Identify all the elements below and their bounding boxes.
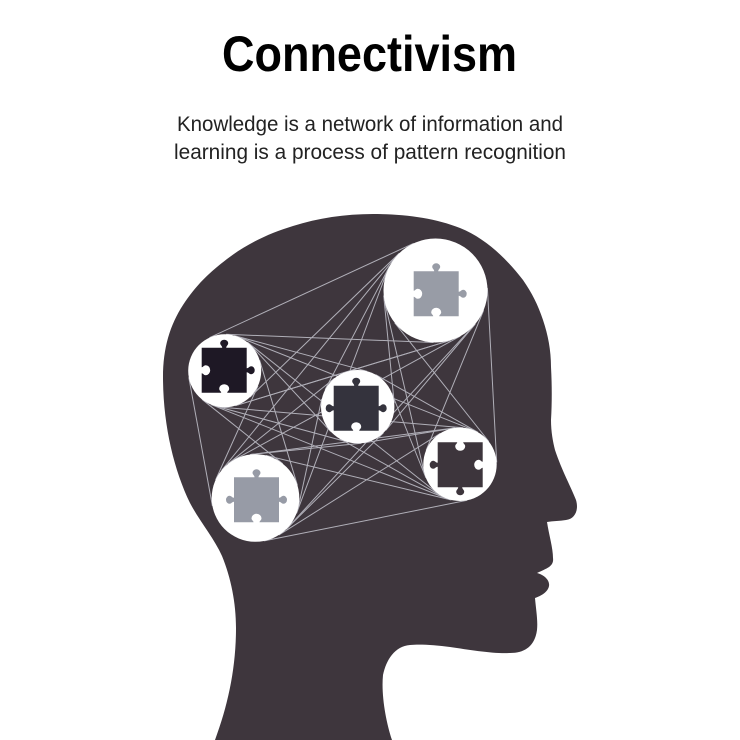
- subtitle text block: [174, 113, 566, 164]
- subtitle text block: Knowledge is a network of information and: [177, 113, 563, 136]
- node: left circle with black puzzle piece: [188, 334, 261, 407]
- head silhouette: [163, 214, 577, 740]
- node: bottom-left circle with grey puzzle piece: [212, 454, 299, 542]
- network connection lines: [189, 243, 497, 541]
- node: right circle with dark puzzle piece: [423, 428, 497, 501]
- title: Connectivism: [222, 26, 517, 82]
- node: top circle with grey puzzle piece: [384, 238, 488, 342]
- subtitle text block: learning is a process of pattern recognition: [174, 141, 566, 164]
- node: centre circle with charcoal puzzle piece: [321, 370, 394, 443]
